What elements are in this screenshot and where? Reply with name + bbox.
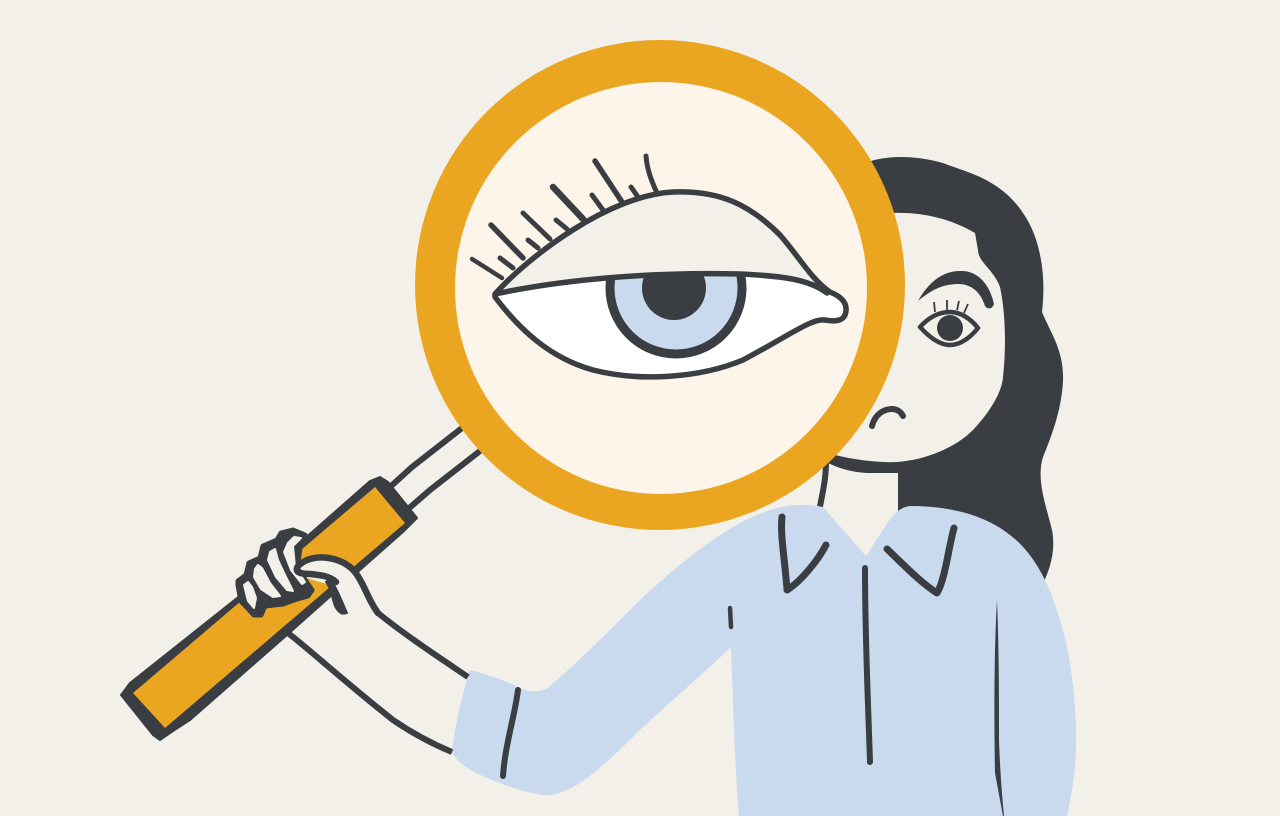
magnifier handle (121, 477, 417, 740)
iris and pupil (606, 276, 746, 358)
thumb fill (297, 558, 378, 620)
collar right (887, 528, 954, 593)
small eye (920, 300, 978, 345)
eye outline (495, 192, 846, 377)
eyeball white (495, 273, 847, 377)
eyelashes (472, 156, 657, 278)
shirt (452, 505, 1076, 816)
fingers (238, 530, 312, 615)
arm crease (730, 608, 731, 627)
sleeve crease (503, 690, 518, 776)
neck line (819, 462, 826, 512)
side fold (994, 600, 1004, 816)
arm and hand (238, 530, 468, 752)
nose (872, 409, 903, 426)
magnifier ring (415, 40, 905, 530)
hair (826, 157, 1063, 590)
thumb outline (297, 557, 378, 613)
thumb crease (326, 578, 347, 614)
illustration: person with magnifying glass (120, 40, 1076, 816)
forearm lower line (288, 633, 452, 752)
large eye (472, 156, 847, 377)
forearm upper line (378, 613, 468, 677)
collar left (782, 517, 826, 590)
magnifier rods (390, 428, 480, 510)
shirt placket (865, 568, 870, 762)
eyelid (495, 192, 835, 296)
small eyebrow (918, 271, 994, 308)
